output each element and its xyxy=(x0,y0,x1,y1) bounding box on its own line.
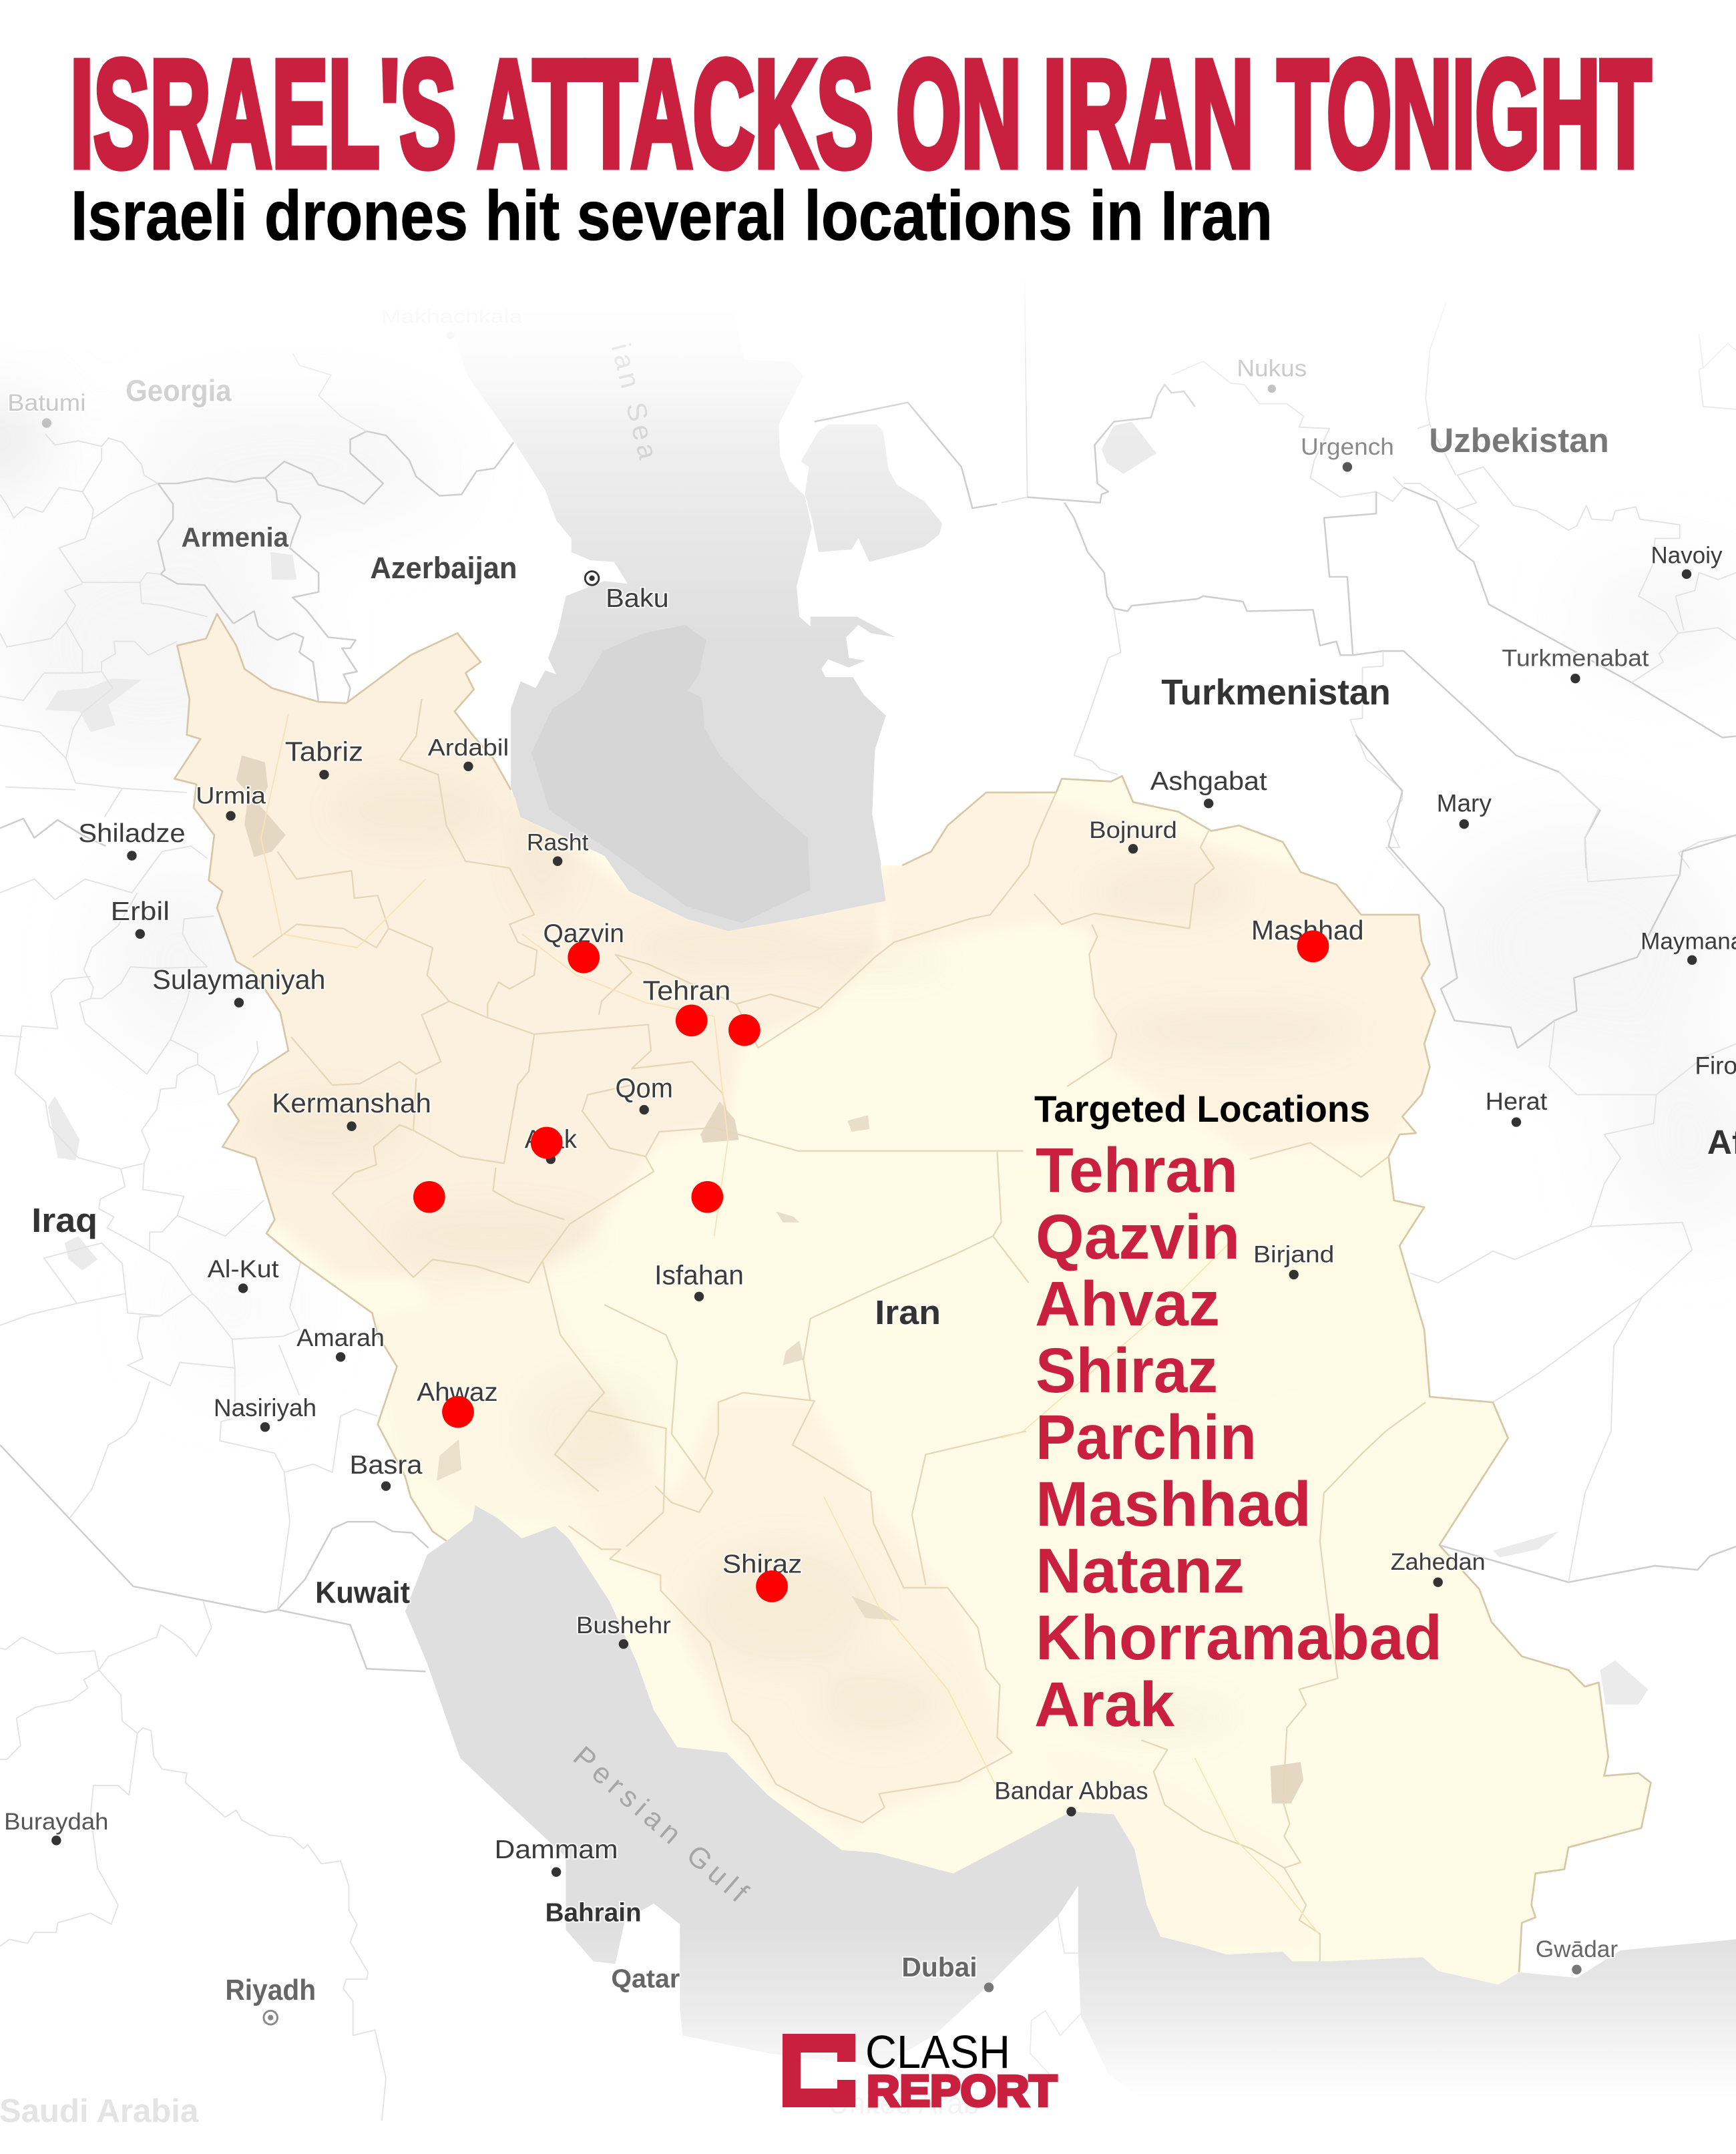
label: Turkmenistan: Turkmenistan xyxy=(1161,673,1391,712)
title word: ON: ON xyxy=(896,29,1022,199)
list item: Mashhad: Mashhad xyxy=(1036,1469,1311,1540)
label: Shiladze: Shiladze xyxy=(78,819,186,848)
province boundaries xyxy=(252,699,1426,1961)
label: Urmia xyxy=(196,783,266,821)
label: United Arab: United Arab xyxy=(828,2087,980,2121)
label: Nukus xyxy=(1237,356,1307,393)
label: Mashhad: Mashhad xyxy=(1251,915,1364,945)
label: Batumi: Batumi xyxy=(7,390,86,416)
label: Ardabil xyxy=(428,734,509,771)
label: Sulaymaniyah: Sulaymaniyah xyxy=(152,964,326,995)
label: Dammam xyxy=(495,1836,618,1877)
logo word: REPORT: REPORT xyxy=(867,2066,1057,2115)
list item: Khorramabad: Khorramabad xyxy=(1036,1602,1442,1673)
kara-bogaz bay xyxy=(801,425,942,562)
list item: Parchin: Parchin xyxy=(1036,1402,1257,1473)
label: Dammam: Dammam xyxy=(495,1836,618,1864)
marker: Mashhad xyxy=(1297,930,1329,962)
label: Basra: Basra xyxy=(350,1451,423,1480)
label: Ashgabat xyxy=(1150,767,1267,809)
label: Erbil xyxy=(111,897,170,939)
label: Makhachkala xyxy=(381,306,523,339)
list heading: Targeted Locations xyxy=(1034,1088,1370,1130)
lakes on neighbouring land xyxy=(45,421,1648,1705)
label: Turkmenabat: Turkmenabat xyxy=(1502,646,1649,672)
logo mark xyxy=(783,2034,855,2107)
label: Rasht: Rasht xyxy=(527,829,589,855)
marker: Ahvaz xyxy=(442,1396,474,1428)
iran regional tint and terrain xyxy=(178,616,1377,1759)
list item: Shiraz: Shiraz xyxy=(1036,1335,1218,1406)
list item: Ahvaz: Ahvaz xyxy=(1035,1269,1220,1339)
label: Gwadar: Gwādar xyxy=(1536,1936,1618,1962)
label: Navoiy: Navoiy xyxy=(1651,542,1723,568)
label: Bahrain: Bahrain xyxy=(546,1899,642,1928)
label: Shiraz: Shiraz xyxy=(722,1550,802,1578)
iran shape xyxy=(165,604,1651,1984)
marker: Arak xyxy=(531,1127,563,1158)
label: Zahedan xyxy=(1391,1549,1486,1587)
qatar peninsula xyxy=(610,1904,680,2056)
label: Nasiriyah: Nasiriyah xyxy=(214,1393,316,1422)
marker: Parchin xyxy=(728,1014,761,1046)
label: Urgench: Urgench xyxy=(1301,434,1394,460)
label: Bojnurd: Bojnurd xyxy=(1089,817,1177,843)
label: Basra xyxy=(350,1451,423,1491)
label: Bandar Abbas xyxy=(994,1777,1148,1816)
logo: clash report xyxy=(783,2026,1057,2115)
label: Azerbaijan: Azerbaijan xyxy=(370,551,517,585)
persian gulf and gulf of oman xyxy=(405,1505,1736,2108)
list item: Tehran: Tehran xyxy=(1036,1135,1238,1206)
label: Bandar Abbas: Bandar Abbas xyxy=(994,1777,1148,1805)
title xyxy=(70,29,1651,199)
label: Turkmenabat xyxy=(1502,646,1649,683)
label: Baku xyxy=(585,572,669,613)
top fade over map xyxy=(0,261,1736,439)
list item: Qazvin: Qazvin xyxy=(1036,1202,1240,1273)
label: Baku: Baku xyxy=(606,584,669,613)
label: Buraydah xyxy=(4,1809,109,1846)
terrain shading on surrounding land xyxy=(0,385,1736,1387)
marker: Shiraz xyxy=(756,1570,788,1602)
label: Batumi xyxy=(7,390,86,428)
title word: ATTACKS: ATTACKS xyxy=(477,29,873,199)
marker: Natanz xyxy=(691,1181,723,1213)
label: Mary: Mary xyxy=(1437,789,1492,817)
label: Dubai: Dubai xyxy=(901,1952,978,1982)
label: Bojnurd xyxy=(1089,817,1177,853)
label: Iran: Iran xyxy=(875,1293,941,1331)
marker: Qazvin xyxy=(568,941,600,974)
label: Tehran: Tehran xyxy=(643,975,730,1006)
list item: Arak: Arak xyxy=(1034,1669,1174,1740)
label: Al-Kut: Al-Kut xyxy=(208,1255,279,1283)
title word: IRAN: IRAN xyxy=(1043,29,1254,199)
label: Shiladze xyxy=(78,819,186,861)
label: Bushehr: Bushehr xyxy=(576,1612,671,1639)
label: Riyadh: Riyadh xyxy=(225,1974,316,2006)
label: Urgench xyxy=(1301,434,1394,472)
label: Dubai xyxy=(901,1952,994,1992)
label: Uzbekistan: Uzbekistan xyxy=(1429,421,1609,459)
salt lakes xyxy=(236,755,1303,1803)
label: Riyadh xyxy=(225,1974,316,2024)
label: Persian Gulf: Persian Gulf xyxy=(567,1740,754,1909)
label: Isfahan: Isfahan xyxy=(654,1259,744,1290)
label: Tabriz: Tabriz xyxy=(285,736,363,767)
label: Georgia: Georgia xyxy=(126,374,232,408)
label: Erbil: Erbil xyxy=(111,897,170,926)
label: Urmia: Urmia xyxy=(196,783,266,809)
label: Al-Kut xyxy=(208,1255,279,1293)
label: Amarah: Amarah xyxy=(296,1323,385,1351)
label: Caspian Sea: ian Sea xyxy=(606,340,664,462)
label: Herat: Herat xyxy=(1486,1087,1548,1115)
label: Qom: Qom xyxy=(616,1073,673,1104)
label: Ashgabat: Ashgabat xyxy=(1150,767,1267,796)
label: Iraq: Iraq xyxy=(31,1201,97,1239)
list: targeted locations xyxy=(1034,1088,1442,1740)
label: Armenia: Armenia xyxy=(182,522,289,553)
label: Makhachkala: Makhachkala xyxy=(381,306,523,327)
label: Ardabil: Ardabil xyxy=(428,734,509,761)
label: Birjand: Birjand xyxy=(1253,1241,1334,1267)
iran land border xyxy=(174,614,1651,1972)
label: Buraydah: Buraydah xyxy=(4,1809,109,1835)
subtitle: Israeli drones hit several locations in Iran xyxy=(71,177,1273,255)
logo word: CLASH: CLASH xyxy=(865,2026,1010,2078)
label: Kermanshah xyxy=(272,1088,431,1131)
strike markers xyxy=(413,930,1329,1602)
title word: ISRAEL'S: ISRAEL'S xyxy=(70,29,456,199)
label: Birjand xyxy=(1253,1241,1334,1279)
label: Nukus: Nukus xyxy=(1237,356,1307,382)
label: Saudi Arabia: Saudi Arabia xyxy=(0,2093,199,2129)
list item: Natanz: Natanz xyxy=(1036,1536,1245,1606)
label: Qatar: Qatar xyxy=(611,1964,680,1993)
label: Mary xyxy=(1437,789,1492,829)
label: Tabriz xyxy=(285,736,363,779)
marker: Tehran xyxy=(676,1004,708,1036)
label: Arak: Arak xyxy=(525,1126,577,1154)
label: Kuwait: Kuwait xyxy=(315,1576,410,1610)
caspian sea xyxy=(443,299,942,931)
label: Kermanshah: Kermanshah xyxy=(272,1088,431,1118)
label: Herat xyxy=(1486,1087,1548,1127)
label: Zahedan: Zahedan xyxy=(1391,1549,1486,1575)
label: Bushehr xyxy=(576,1612,671,1649)
label: Qazvin: Qazvin xyxy=(544,919,624,948)
label: Gwadar xyxy=(1536,1936,1618,1974)
marker: Khorramabad xyxy=(413,1181,445,1213)
label: Ahwaz: Ahwaz xyxy=(417,1378,498,1407)
